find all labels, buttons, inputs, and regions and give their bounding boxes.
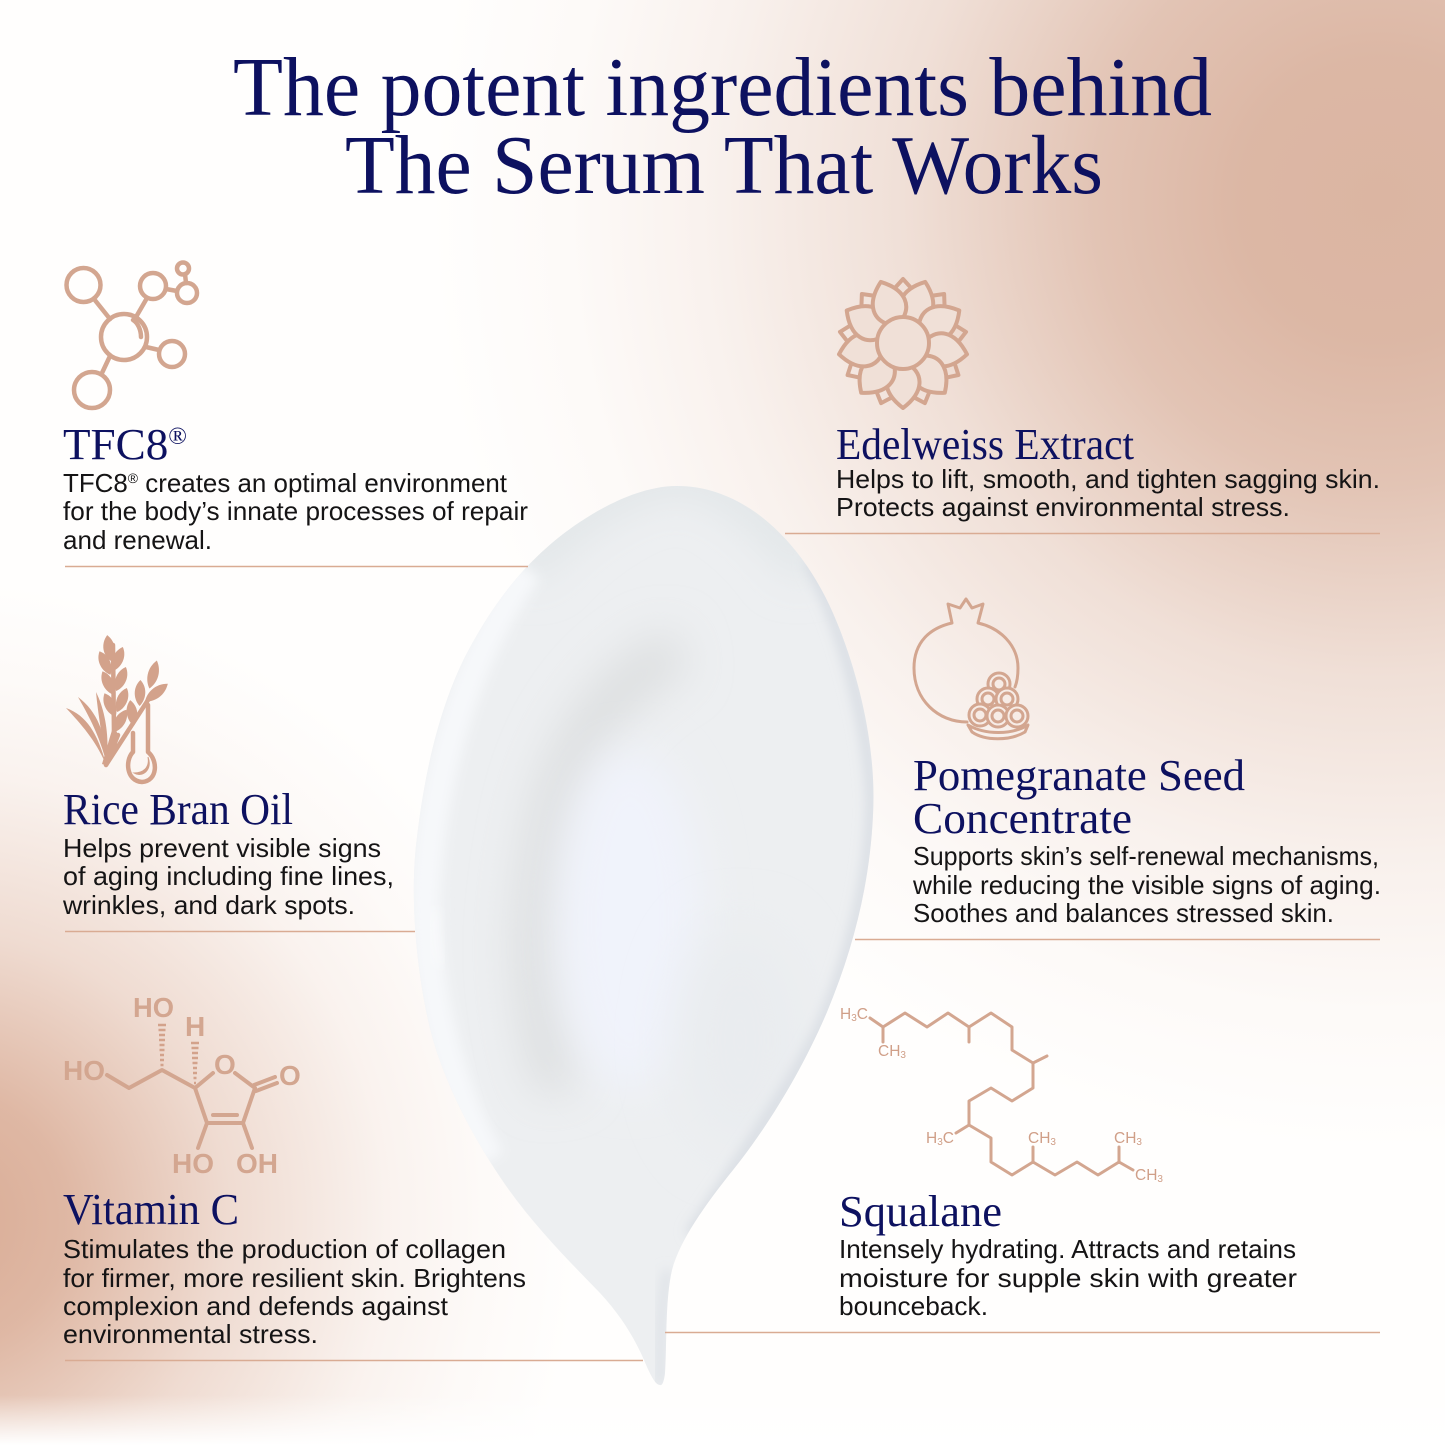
text: Squalane description: bounceback. <box>839 1291 988 1321</box>
icon: squalane molecule: 3 <box>1157 1174 1163 1185</box>
text: Edelweiss description <box>836 464 1380 522</box>
panel: Pomegranate Seed Concentrate <box>855 599 1381 940</box>
icon: squalane molecule: H <box>926 1130 937 1147</box>
icon: squalane molecule: C <box>857 1006 868 1023</box>
heading: Vitamin C: Vitamin C <box>63 1185 239 1234</box>
heading: TFC8: TFC8 <box>63 420 166 469</box>
panel: Edelweiss Extract <box>785 276 1380 534</box>
icon: vitamin C molecule: HO <box>63 1055 105 1086</box>
icon: squalane molecule <box>840 1006 1163 1185</box>
title: The Serum That Works <box>345 119 1103 212</box>
text: Edelweiss description: Protects against environmental stress. <box>836 492 1290 522</box>
text: Pomegranate description <box>912 841 1381 928</box>
panel: Squalane <box>665 1006 1380 1332</box>
panel: Rice Bran Oil <box>62 634 415 932</box>
icon: squalane molecule: C <box>943 1130 954 1147</box>
heading: Edelweiss Extract: Edelweiss Extract <box>836 420 1134 469</box>
icon: vitamin C molecule: OH <box>236 1148 278 1179</box>
panel: Vitamin C <box>63 992 643 1360</box>
text: Vitamin C description: Stimulates the production of collagen <box>63 1234 506 1264</box>
icon: vitamin C molecule: H <box>185 1011 205 1042</box>
icon: squalane molecule: 3 <box>937 1137 943 1148</box>
text: Pomegranate description: Supports skin’s self-renewal mechanisms, <box>913 841 1379 871</box>
text: Vitamin C description: environmental stress. <box>63 1319 318 1349</box>
text: Rice Bran Oil description: Helps prevent visible signs <box>63 833 381 863</box>
icon: squalane molecule: CH <box>1135 1167 1157 1184</box>
text: Squalane description: moisture for supple skin with greater <box>839 1263 1297 1293</box>
text: Rice Bran Oil description: of aging including fine lines, <box>63 861 394 891</box>
text: TFC8 description: for the body’s innate processes of repair <box>63 496 528 526</box>
icon: squalane molecule: 3 <box>900 1050 906 1061</box>
text: TFC8 description: creates an optimal environment <box>138 468 508 498</box>
text: Vitamin C description <box>63 1234 526 1349</box>
text: Edelweiss description: Helps to lift, smooth, and tighten sagging skin. <box>836 464 1380 494</box>
icon: squalane molecule: 3 <box>851 1013 857 1024</box>
icon: molecule <box>66 262 197 408</box>
text: TFC8 description: ® <box>128 470 139 486</box>
icon: squalane molecule: 3 <box>1136 1137 1142 1148</box>
heading: TFC8: ® <box>168 424 187 450</box>
heading: Pomegranate Seed Concentrate: Concentrate <box>913 794 1132 843</box>
text: Pomegranate description: while reducing the visible signs of aging. <box>912 870 1381 900</box>
heading: Pomegranate Seed Concentrate <box>913 751 1245 843</box>
icon: squalane molecule: CH <box>1114 1130 1136 1147</box>
text: Pomegranate description: Soothes and balances stressed skin. <box>913 898 1334 928</box>
title <box>233 41 1212 212</box>
text: Squalane description: Intensely hydrating. Attracts and retains <box>839 1234 1296 1264</box>
heading: Squalane: Squalane <box>839 1187 1002 1236</box>
icon: squalane molecule: CH <box>1028 1130 1050 1147</box>
icon: vitamin C molecule <box>63 992 301 1179</box>
icon: squalane molecule: H <box>840 1006 851 1023</box>
icon: vitamin C molecule: O <box>279 1060 301 1091</box>
text: TFC8 description: and renewal. <box>63 525 212 555</box>
icon: vitamin C molecule: O <box>214 1049 236 1080</box>
icon: edelweiss flower <box>836 276 970 408</box>
cream swatch <box>414 470 873 1385</box>
text: Rice Bran Oil description: wrinkles, and dark spots. <box>62 890 355 920</box>
text: Squalane description <box>839 1234 1297 1321</box>
icon: squalane molecule: CH <box>878 1043 900 1060</box>
panel: TFC8 <box>63 262 528 566</box>
text: Vitamin C description: for firmer, more resilient skin. Brightens <box>63 1263 526 1293</box>
text: Rice Bran Oil description <box>62 833 394 920</box>
text: TFC8 description: TFC8 <box>63 468 128 498</box>
text: Vitamin C description: complexion and defends against <box>63 1291 449 1321</box>
icon: vitamin C molecule: HO <box>172 1148 214 1179</box>
icon: vitamin C molecule: HO <box>133 992 174 1023</box>
heading: Rice Bran Oil: Rice Bran Oil <box>63 785 293 834</box>
text: TFC8 description <box>63 468 528 555</box>
heading: Pomegranate Seed Concentrate: Pomegranate Seed <box>913 751 1245 800</box>
icon: squalane molecule: 3 <box>1050 1137 1056 1148</box>
icon: pomegranate <box>914 599 1028 739</box>
title: The potent ingredients behind <box>233 41 1212 134</box>
icon: rice and oil drop <box>66 634 171 782</box>
